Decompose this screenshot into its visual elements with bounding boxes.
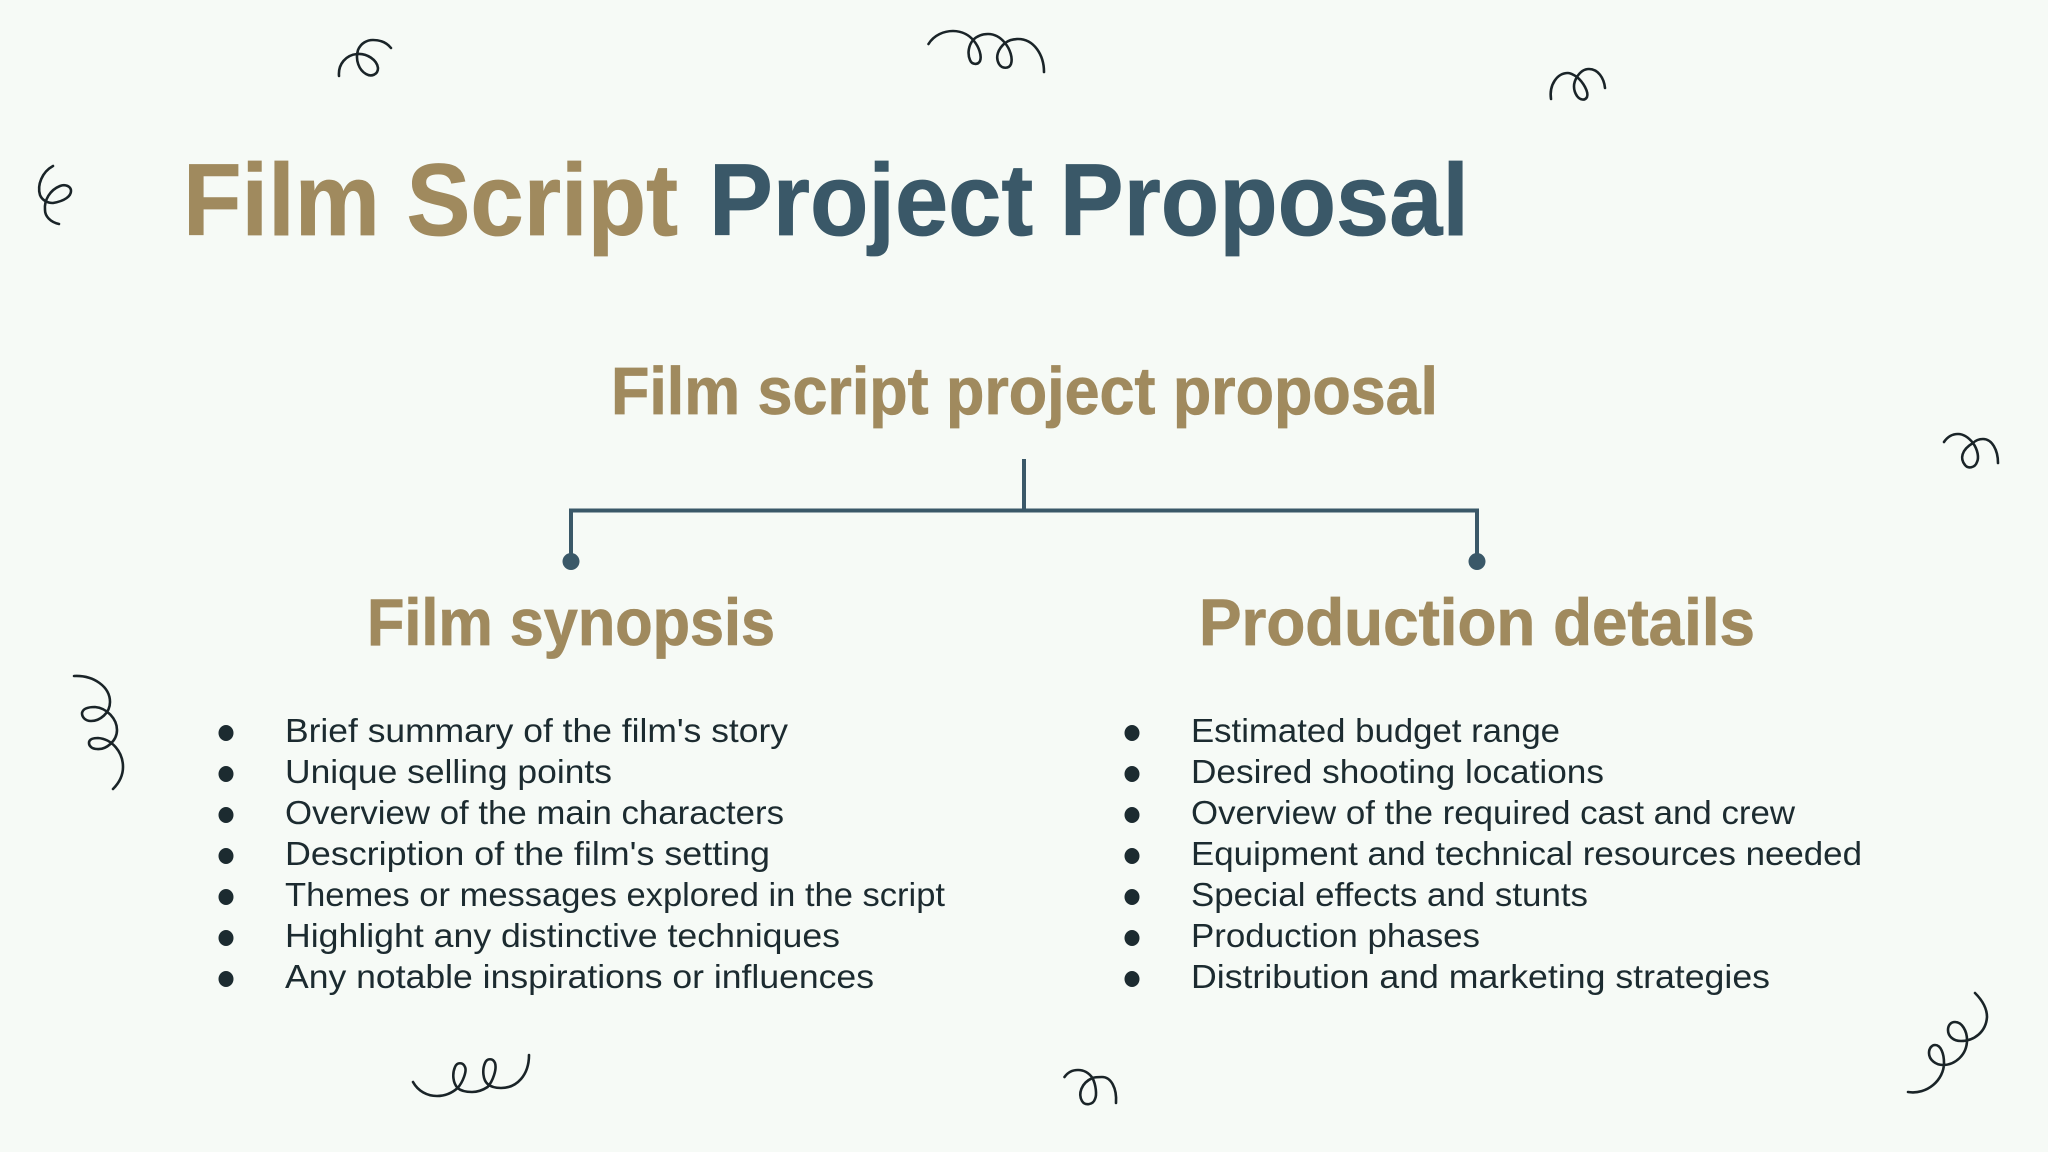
bullet list: production details (1124, 712, 1862, 995)
title: Project Proposal (709, 143, 1469, 257)
bullet list: film synopsis: Overview of the main characters (285, 794, 784, 831)
bullet list: film synopsis: Highlight any distinctive techniques (285, 917, 840, 954)
bullet list: production details: Estimated budget range (1191, 712, 1560, 749)
bullet list: film synopsis (218, 712, 945, 995)
heading: film script project proposal: Film script project proposal (611, 354, 1438, 429)
bullet list: film synopsis: Description of the film's setting (285, 835, 770, 872)
bullet list: production details: Production phases (1191, 917, 1480, 954)
title: Film Script (183, 143, 678, 257)
heading: film synopsis: Film synopsis (367, 585, 775, 659)
bullet list: film synopsis: Any notable inspirations or influences (285, 958, 874, 995)
squiggle: left of title (39, 166, 71, 224)
heading: production details: Production details (1199, 585, 1755, 659)
squiggle: bottom middle (1064, 1070, 1116, 1104)
bullet list: production details: Desired shooting locations (1191, 753, 1604, 790)
squiggle: right (1944, 434, 1998, 467)
panel: production details (1124, 585, 1862, 995)
bullet list: film synopsis: Brief summary of the film's story (285, 712, 789, 749)
title (183, 143, 1469, 257)
bullet list: production details: Special effects and stunts (1191, 876, 1588, 913)
bullet list: production details: Equipment and technical resources needed (1191, 835, 1862, 872)
bullet list: production details: Distribution and marketing strategies (1191, 958, 1770, 995)
connector tree (562, 459, 1486, 570)
squiggle: bottom left (413, 1055, 529, 1096)
squiggle: left tall (74, 676, 123, 789)
panel: film synopsis (218, 585, 945, 995)
squiggle: top middle (928, 31, 1044, 72)
bullet list: film synopsis: Themes or messages explored in the script (285, 876, 945, 913)
squiggle: top left (339, 40, 391, 76)
bullet list: film synopsis: Unique selling points (285, 753, 612, 790)
squiggle: bottom right (1908, 993, 1987, 1092)
bullet list: production details: Overview of the required cast and crew (1191, 794, 1795, 831)
squiggle: top right (1551, 69, 1605, 100)
